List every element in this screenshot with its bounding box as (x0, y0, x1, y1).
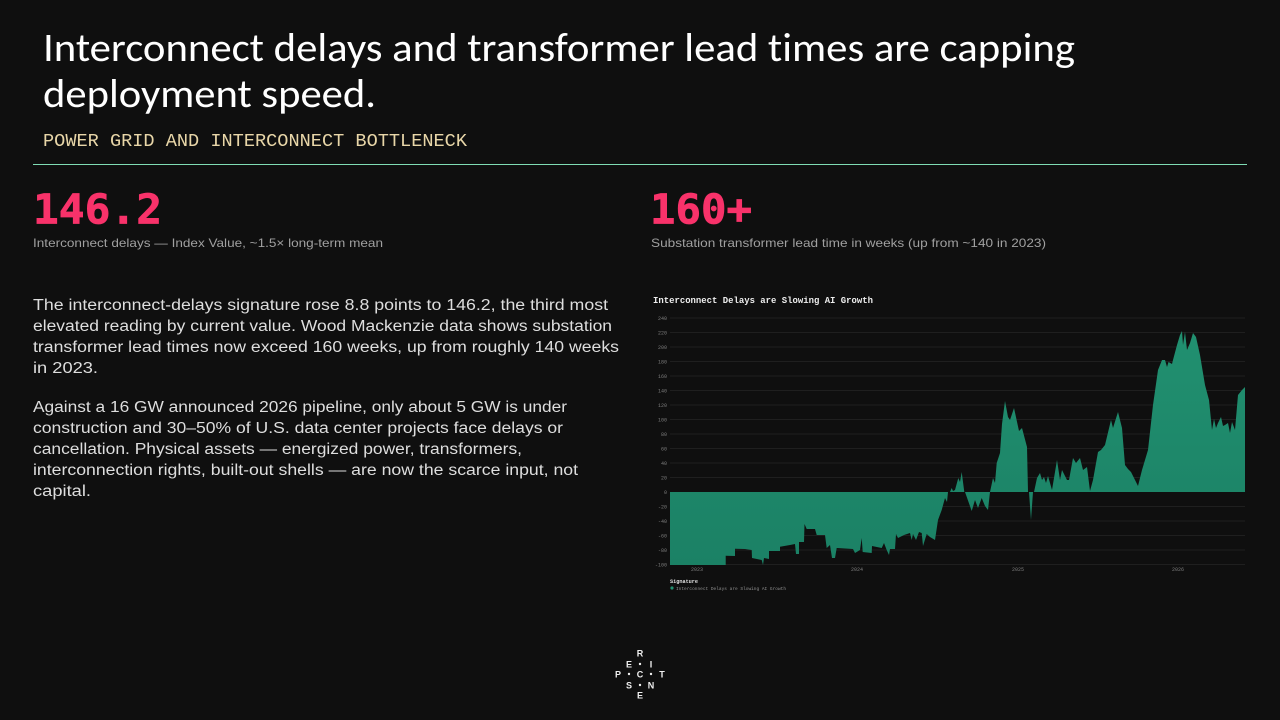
text block: paragraph one: transformer lead times now exceed 160 weeks, up from roughly 140 weeks (33, 339, 619, 356)
y axis labels: 120 (658, 403, 667, 409)
subtitle: POWER GRID AND INTERCONNECT BOTTLENECK (43, 131, 468, 152)
stat: interconnect delays: Interconnect delays — Index Value, ~1.5× long-term mean (33, 236, 383, 250)
chart title: Interconnect Delays are Slowing AI Growth (653, 296, 873, 306)
y axis labels (655, 316, 667, 568)
x axis labels: 2024 (851, 567, 863, 573)
title: deployment speed. (43, 69, 376, 118)
legend: Interconnect Delays are Slowing AI Growth (676, 586, 786, 592)
y axis labels: -80 (658, 548, 667, 554)
text block: paragraph one: The interconnect-delays signature rose 8.8 points to 146.2, the third most (33, 297, 609, 314)
title: Interconnect delays and transformer lead times are capping (43, 23, 1075, 72)
x axis labels (691, 567, 1184, 573)
y axis labels: 240 (658, 316, 667, 322)
y axis labels: 100 (658, 418, 667, 424)
y axis labels: 220 (658, 330, 667, 336)
y axis labels: -60 (658, 534, 667, 540)
y axis labels: 200 (658, 345, 667, 351)
text block: paragraph one: elevated reading by current value. Wood Mackenzie data shows substation (33, 318, 612, 335)
text block: paragraph two: Against a 16 GW announced 2026 pipeline, only about 5 GW is under (33, 399, 567, 416)
x axis labels: 2026 (1172, 567, 1184, 573)
chart: interconnect delays area chart (653, 296, 1245, 592)
text block: paragraph two (33, 399, 579, 500)
stat: transformer lead time: Substation transformer lead time in weeks (up from ~140 in 2023) (651, 236, 1046, 250)
logo: N (648, 680, 654, 690)
y axis labels: 0 (664, 490, 667, 496)
stat: interconnect delays (33, 186, 383, 250)
logo: S (626, 680, 632, 690)
legend (670, 579, 786, 592)
logo: R (637, 648, 644, 658)
logo: I (650, 660, 652, 670)
logo: E (637, 690, 643, 700)
text block: paragraph two: construction and 30–50% of U.S. data center projects face delays or (33, 420, 563, 437)
y axis labels: -100 (655, 562, 667, 568)
y axis labels: 60 (661, 446, 667, 452)
y axis labels: 140 (658, 388, 667, 394)
y axis labels: 20 (661, 476, 667, 482)
text block: paragraph one: in 2023. (33, 360, 98, 377)
x axis labels: 2023 (691, 567, 703, 573)
legend: Signature (670, 579, 698, 585)
logo: T (659, 670, 665, 680)
logo (615, 648, 665, 700)
y axis labels: 40 (661, 461, 667, 467)
stat: transformer lead time (650, 186, 1046, 250)
stat: transformer lead time: 160+ (650, 186, 752, 234)
logo: E (626, 660, 632, 670)
text block: paragraph two: capital. (33, 483, 91, 500)
logo: P (615, 670, 621, 680)
y axis labels: -20 (658, 504, 667, 510)
area series (670, 331, 1245, 565)
text block: paragraph two: interconnection rights, built-out shells — are now the scarce input, not (33, 462, 579, 479)
x axis labels: 2025 (1012, 567, 1024, 573)
text block: paragraph one (33, 297, 619, 377)
y axis labels: 160 (658, 374, 667, 380)
logo: C (637, 670, 644, 680)
y axis labels: 80 (661, 432, 667, 438)
y axis labels: -40 (658, 519, 667, 525)
stat: interconnect delays: 146.2 (33, 186, 162, 234)
title (43, 23, 1075, 118)
text block: paragraph two: cancellation. Physical assets — energized power, transformers, (33, 441, 522, 458)
y axis labels: 180 (658, 360, 667, 366)
